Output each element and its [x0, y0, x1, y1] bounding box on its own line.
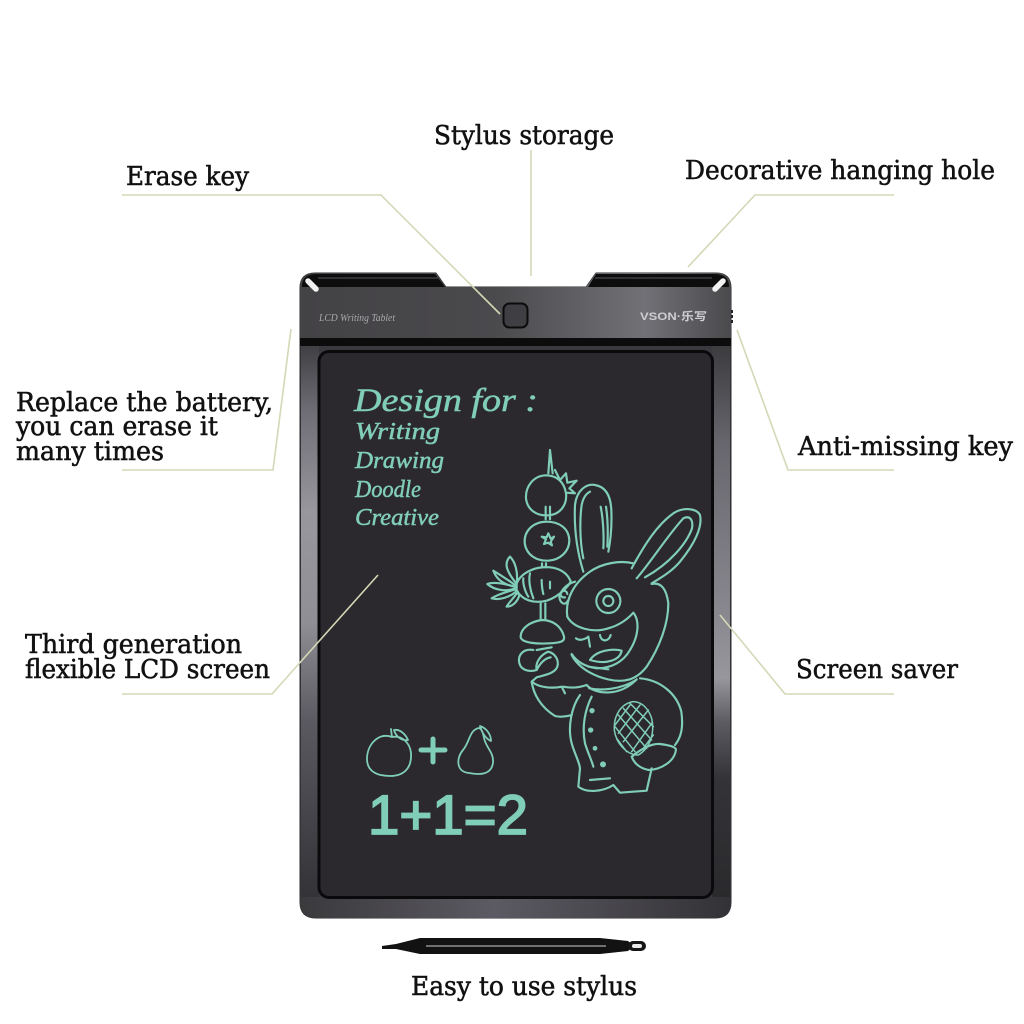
left top black notch strip: [302, 274, 445, 287]
tomato: [526, 470, 577, 515]
left hanging hole: [308, 281, 316, 289]
handwritten list on screen: Writing: [355, 419, 440, 445]
leader line: screen saver: [720, 615, 894, 694]
tablet device: [300, 273, 733, 918]
plus sign: [421, 739, 445, 762]
handwritten list on screen: Doodle: [354, 477, 421, 503]
rabbit drawing with vegetable skewer: [487, 450, 701, 793]
notch highlights: [318, 277, 712, 279]
label: decorative hanging hole: Decorative hanging hole: [685, 156, 995, 186]
left ear: [575, 485, 612, 572]
left arm: [532, 682, 587, 717]
skewer: [541, 450, 553, 620]
handwritten list on screen: Creative: [355, 505, 439, 531]
right hanging hole: [715, 281, 723, 289]
pear: [458, 726, 493, 774]
leader line: replace the battery: [122, 329, 291, 470]
header bar: [300, 273, 731, 339]
fruit sum drawing: [367, 726, 493, 776]
leader line: stylus storage: [530, 150, 532, 276]
apple: [367, 729, 411, 776]
mushroom cap: [521, 620, 564, 644]
right top black notch strip: [588, 274, 729, 287]
collar and body: [570, 678, 682, 793]
stylus highlight: [426, 945, 606, 947]
leader line: decorative hanging hole: [688, 195, 894, 267]
head: [559, 562, 668, 681]
label: replace the battery: you can erase it: [15, 412, 219, 442]
label: easy to use stylus: Easy to use stylus: [411, 972, 637, 1002]
label: replace the battery: [15, 388, 273, 467]
handwritten list on screen: Design for :: [353, 383, 538, 419]
label: replace the battery: many times: [16, 437, 164, 467]
label: screen saver: Screen saver: [796, 655, 959, 685]
leader line: erase key: [122, 195, 500, 314]
label: third generation flexible LCD screen: Third generation: [25, 630, 242, 660]
label: third generation flexible LCD screen: [25, 630, 270, 685]
anti-missing key notches: [731, 310, 733, 323]
leader line: third generation screen: [122, 575, 378, 694]
fruit slice with star: [525, 522, 569, 561]
stylus pen: [382, 938, 646, 954]
equation 1+1=2: 1+1=2: [368, 783, 528, 846]
handwritten list on screen: Drawing: [354, 448, 444, 474]
label: anti-missing key: Anti-missing key: [797, 432, 1013, 462]
handwritten list on screen: [353, 383, 538, 531]
label: replace the battery: Replace the battery,: [16, 388, 273, 418]
right frame strip: [712, 346, 730, 900]
hand: [519, 647, 565, 693]
bottom frame edge: [300, 897, 731, 918]
erase key button: [504, 304, 528, 328]
VSON brand: VSON·乐写: [640, 310, 707, 323]
LCD Writing Tablet caption: LCD Writing Tablet: [318, 312, 396, 324]
buttons: [588, 708, 606, 767]
carrot: [517, 567, 571, 602]
tummy crosshatch: [614, 702, 653, 755]
stylus barrel: [382, 938, 634, 954]
right ear: [632, 509, 701, 583]
right hand: [632, 744, 676, 770]
LCD screen: [319, 352, 712, 898]
carrot leaves: [487, 557, 519, 607]
label: third generation flexible LCD screen: flexible LCD screen: [25, 655, 270, 685]
label: stylus storage: Stylus storage: [434, 121, 614, 151]
stylus end loop: [628, 941, 646, 951]
leader line: anti-missing key: [737, 330, 894, 470]
black separator line: [300, 338, 731, 346]
left frame strip: [301, 346, 319, 900]
eye: [596, 589, 620, 613]
mouth: [567, 613, 637, 669]
label: erase key: Erase key: [126, 162, 249, 192]
tablet body frame: [300, 273, 731, 918]
